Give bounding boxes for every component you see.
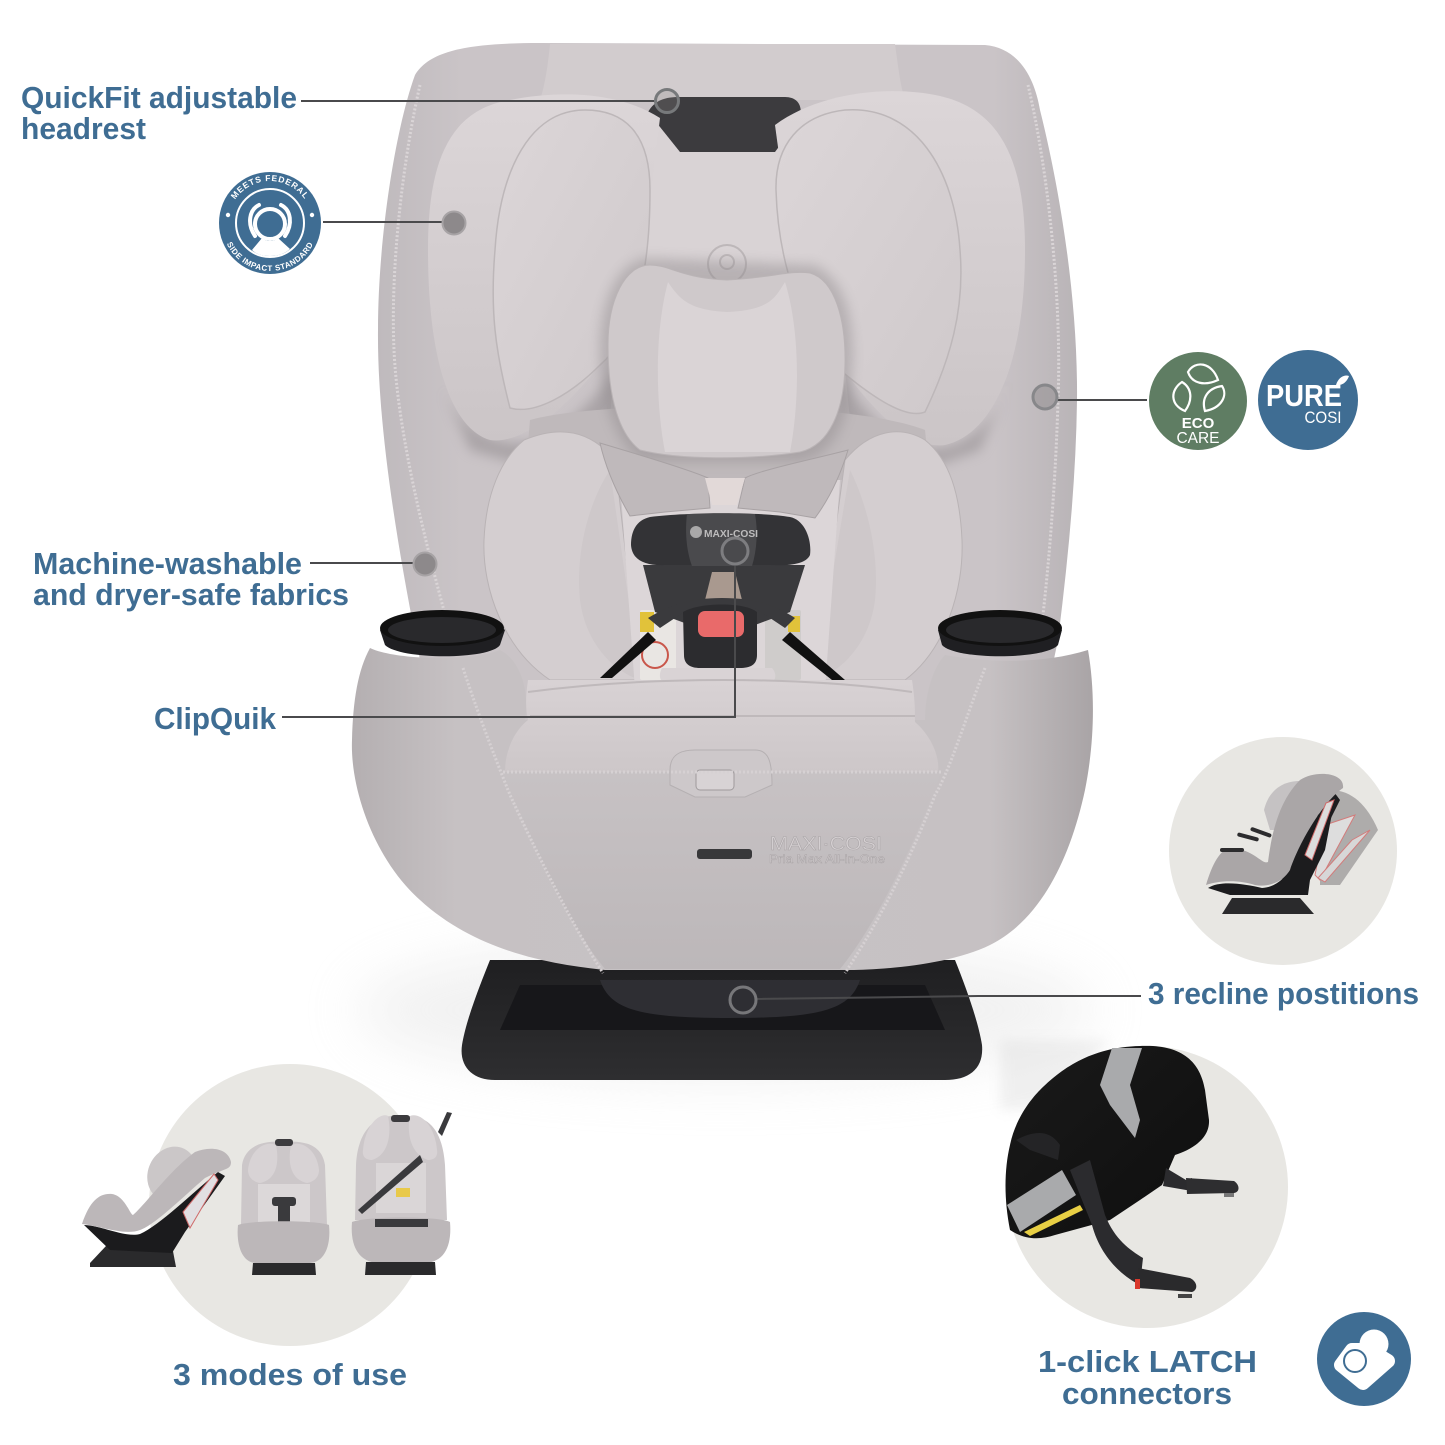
dark gap behind infant insert bbox=[525, 406, 930, 480]
callout: machine-washable fabrics: Machine-washable bbox=[33, 546, 302, 581]
callout: 3 recline positions bbox=[730, 976, 1419, 1013]
badge: meets federal side impact standard bbox=[219, 172, 466, 274]
soft floor shadow bbox=[355, 940, 1095, 1080]
callout: 3 recline positions: 3 recline postitions bbox=[1148, 976, 1419, 1011]
callout: ClipQuik bbox=[154, 538, 748, 736]
curved badge text: MEETS FEDERAL bbox=[230, 175, 308, 200]
callout: machine-washable fabrics bbox=[33, 546, 436, 612]
seat cushion bbox=[505, 680, 938, 772]
pure cosi badge bbox=[1258, 350, 1358, 450]
shadow fade from seat bbox=[1000, 1040, 1110, 1110]
label: 1-click LATCH connectors: 1-click LATCH bbox=[1038, 1344, 1257, 1379]
label: 3 modes of use: 3 modes of use bbox=[173, 1357, 407, 1392]
chest strap webbing bbox=[643, 565, 805, 625]
harness buckle bbox=[648, 598, 795, 668]
label: QuickFit adjustable bbox=[21, 80, 297, 115]
infant insert shadow bbox=[600, 258, 853, 462]
infant head insert bbox=[608, 265, 845, 458]
crotch pad bbox=[660, 668, 775, 683]
headrest centre panel bbox=[610, 120, 850, 420]
LATCH strap bbox=[1070, 1160, 1143, 1285]
label: 1-click LATCH connectors: connectors bbox=[1062, 1376, 1232, 1411]
harness straps bbox=[600, 632, 845, 680]
seat back shell bbox=[378, 43, 1077, 725]
side body pad right bbox=[815, 432, 962, 680]
callout: eco care and pure cosi badges bbox=[1033, 350, 1358, 450]
callout: QuickFit adjustable headrest bbox=[21, 80, 678, 146]
forward-facing seat front view bbox=[238, 1139, 329, 1275]
headrest shadow bbox=[440, 360, 1010, 475]
callout: QuickFit adjustable headrest: headrest bbox=[21, 111, 146, 146]
upper connector bbox=[1163, 1168, 1238, 1197]
headrest handle bbox=[648, 97, 801, 152]
lower seat pod bbox=[352, 648, 1093, 970]
pure cosi badge: PURE bbox=[1266, 378, 1342, 413]
logo emboss on headrest bbox=[708, 245, 746, 283]
black seat underside bbox=[1006, 1046, 1209, 1238]
eco care badge bbox=[1149, 352, 1247, 450]
headrest left wing bbox=[428, 94, 660, 440]
headrest right wing bbox=[775, 91, 1025, 445]
ClipQuik chest clip bbox=[631, 513, 810, 566]
pure cosi badge: COSI bbox=[1304, 408, 1342, 427]
eco care badge: CARE bbox=[1176, 430, 1220, 447]
left cup holder bbox=[380, 610, 505, 656]
recline seat bbox=[1206, 774, 1343, 914]
rear-facing seat side view bbox=[82, 1138, 231, 1267]
harness label patches bbox=[640, 610, 801, 680]
ClipQuik chest clip: MAXI-COSI bbox=[704, 529, 758, 540]
icon: Maxi-Cosi logo mark bbox=[1317, 1312, 1411, 1406]
side body pad left bbox=[484, 432, 640, 680]
brand emboss: MAXI·COSI bbox=[770, 834, 882, 855]
brand emboss bbox=[769, 834, 885, 866]
right cup holder bbox=[938, 610, 1062, 656]
label: 1-click LATCH connectors bbox=[1038, 1344, 1257, 1411]
badge: meets federal side impact standard: SIDE IMPACT STANDARD bbox=[227, 242, 312, 271]
plastic base bbox=[462, 960, 982, 1080]
recline illustration circle bbox=[1169, 737, 1397, 965]
reclined ghost seat bbox=[1315, 790, 1378, 885]
callout: ClipQuik: ClipQuik bbox=[154, 701, 277, 736]
shoulder strap pads bbox=[600, 443, 848, 518]
eco care badge: ECO bbox=[1182, 415, 1215, 432]
seams bbox=[463, 668, 985, 973]
booster seat front view bbox=[352, 1112, 452, 1275]
callout: machine-washable fabrics: and dryer-safe fabrics bbox=[33, 577, 349, 612]
front panel bbox=[503, 750, 940, 969]
centre back between pads bbox=[620, 480, 840, 690]
brand emboss: Pria Max All-in-One bbox=[769, 852, 885, 866]
main product: car seat bbox=[352, 43, 1095, 1080]
3 modes of use illustration bbox=[82, 1064, 452, 1346]
LATCH connector illustration bbox=[1000, 1040, 1288, 1328]
lower connector bbox=[1135, 1268, 1196, 1298]
